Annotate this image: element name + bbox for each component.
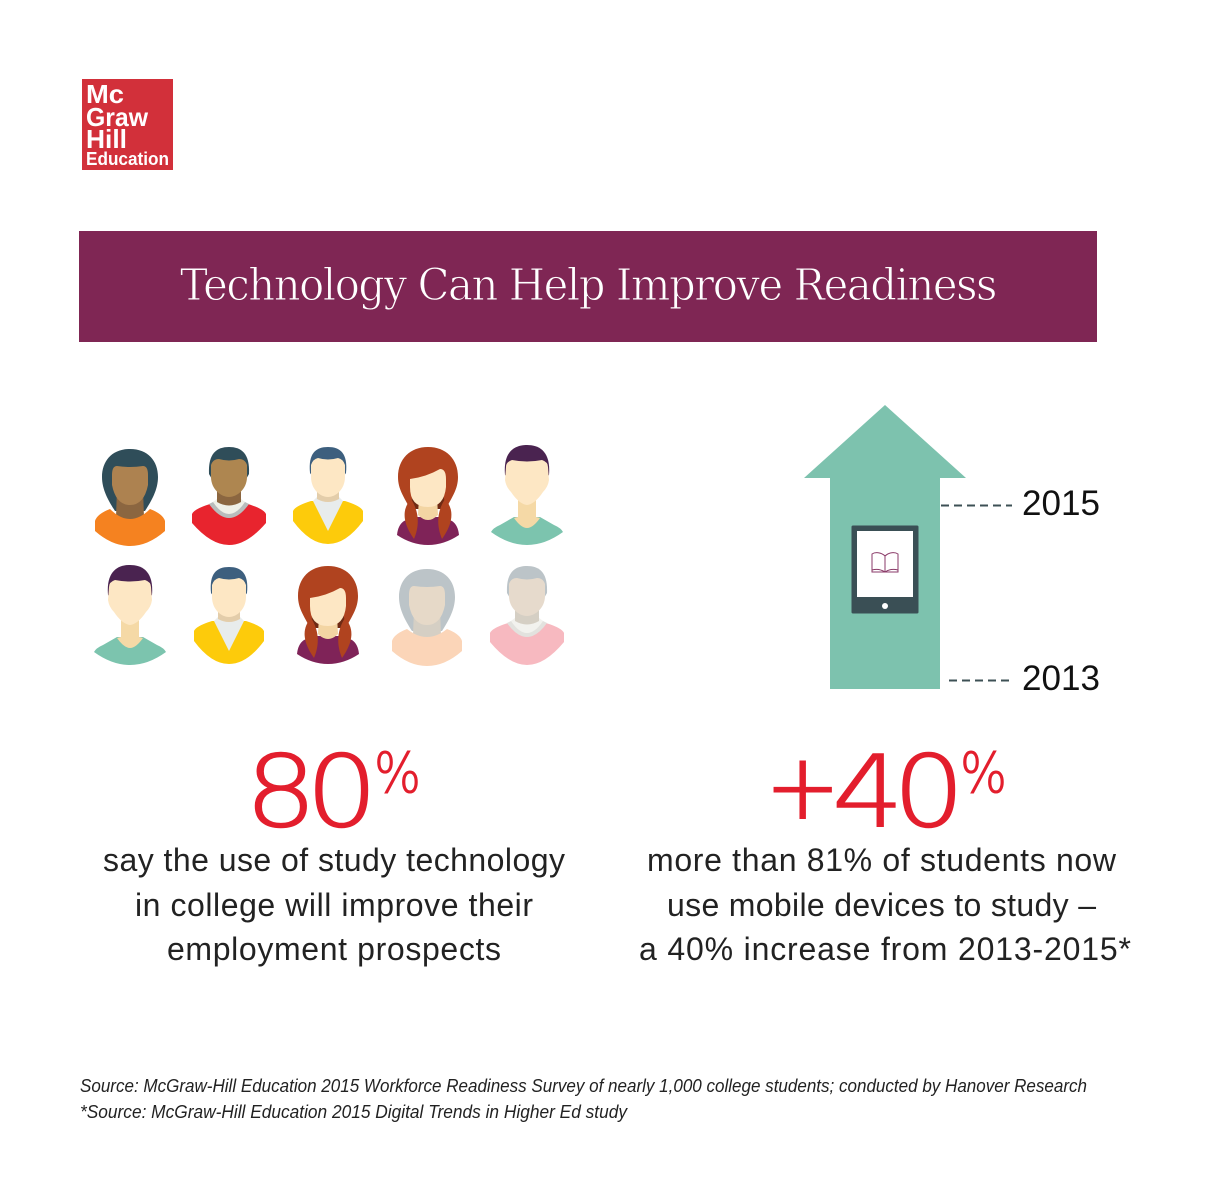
logo: McGraw Hill Education bbox=[82, 79, 173, 170]
stat: plus 40 percent: + bbox=[765, 735, 840, 840]
text: mobile devices statement: a 40% increase from 2013-2015* bbox=[639, 931, 1131, 967]
source notes: Source: McGraw-Hill Education 2015 Workforce Readiness Survey of nearly 1,000 college students; conducted by Hanover Research bbox=[80, 1076, 1087, 1096]
icon: tablet with book bbox=[852, 526, 918, 614]
text: employment prospects statement: say the use of study technology bbox=[103, 842, 565, 878]
source notes bbox=[80, 1076, 1087, 1122]
people icon grid bbox=[94, 445, 564, 666]
label: 2015 with dashed leader: 2015 bbox=[1022, 484, 1100, 523]
text: mobile devices statement bbox=[639, 842, 1131, 967]
title banner bbox=[79, 231, 1097, 342]
text: mobile devices statement: more than 81% of students now bbox=[647, 842, 1117, 878]
stat: plus 40 percent: % bbox=[960, 741, 1007, 805]
stat: 80 percent: 80 bbox=[245, 735, 368, 850]
stat: plus 40 percent bbox=[765, 735, 1007, 850]
person: man teal shirt bbox=[491, 445, 563, 545]
text: employment prospects statement: in college will improve their bbox=[135, 887, 533, 923]
text: mobile devices statement: use mobile devices to study – bbox=[667, 887, 1096, 923]
stat: 80 percent: % bbox=[374, 741, 421, 805]
person: older woman grey hair bbox=[392, 569, 462, 666]
person: man teal shirt, second row bbox=[94, 565, 166, 665]
person: woman red hair bbox=[397, 447, 459, 545]
text: employment prospects statement bbox=[103, 842, 565, 967]
arrow: growth from 2013 to 2015 bbox=[804, 405, 966, 689]
logo: McGraw Hill Education: Graw bbox=[86, 102, 149, 132]
person: man yellow sweater bbox=[293, 447, 363, 544]
person: woman orange top bbox=[95, 449, 165, 546]
title banner: Technology Can Help Improve Readiness bbox=[180, 260, 996, 311]
person: man yellow sweater, second row bbox=[194, 567, 264, 664]
person: older man pink sweater bbox=[490, 566, 564, 665]
source notes: *Source: McGraw-Hill Education 2015 Digital Trends in Higher Ed study bbox=[80, 1102, 628, 1122]
label: 2013 with dashed leader: 2013 bbox=[1022, 659, 1100, 698]
person: man red sweater bbox=[192, 447, 266, 545]
stat: plus 40 percent: 40 bbox=[832, 735, 955, 850]
logo: McGraw Hill Education: Mc bbox=[86, 79, 124, 109]
text: employment prospects statement: employment prospects bbox=[167, 931, 501, 967]
logo: McGraw Hill Education: Hill bbox=[86, 124, 127, 154]
logo: McGraw Hill Education: Education bbox=[86, 149, 169, 169]
person: woman red hair, second row bbox=[297, 566, 359, 664]
stat: 80 percent bbox=[245, 735, 421, 850]
